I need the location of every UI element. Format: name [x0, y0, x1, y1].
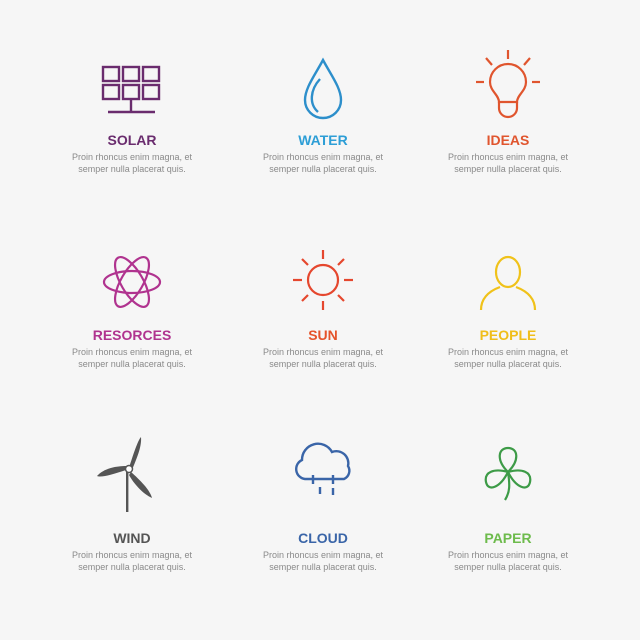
description: water [263, 152, 384, 174]
icon: cloud with rain [296, 444, 349, 495]
icon: light bulb [476, 50, 540, 117]
item: sun [263, 250, 384, 369]
description: resources: Proin rhoncus enim magna, et [72, 347, 193, 357]
description: paper: semper nulla placerat quis. [454, 562, 562, 572]
title: sun: SUN [308, 327, 338, 343]
description: sun [263, 347, 384, 369]
item: people [448, 257, 569, 369]
title: solar: SOLAR [108, 132, 156, 148]
item: water [263, 60, 384, 174]
description: solar [72, 152, 193, 174]
description: ideas [448, 152, 569, 174]
title: cloud: CLOUD [298, 530, 348, 546]
description: resources: semper nulla placerat quis. [78, 359, 186, 369]
title: resources: RESORCES [93, 327, 171, 343]
title: ideas: IDEAS [487, 132, 529, 148]
icon: clover [486, 448, 530, 500]
icon: wind turbine [97, 437, 152, 512]
description: sun: semper nulla placerat quis. [269, 359, 377, 369]
title: wind: WIND [113, 530, 151, 546]
description: ideas: Proin rhoncus enim magna, et [448, 152, 569, 162]
title: water: WATER [298, 132, 348, 148]
item: solar [72, 67, 193, 174]
icon: water drop [305, 60, 341, 118]
icon: solar panel [103, 67, 159, 112]
description: wind: semper nulla placerat quis. [78, 562, 186, 572]
item: resources [72, 252, 193, 369]
icon: atom [104, 252, 160, 312]
description: water: Proin rhoncus enim magna, et [263, 152, 384, 162]
description: solar: Proin rhoncus enim magna, et [72, 152, 193, 162]
description: wind: Proin rhoncus enim magna, et [72, 550, 193, 560]
description: people: semper nulla placerat quis. [454, 359, 562, 369]
icon: person [481, 257, 535, 310]
description: people: Proin rhoncus enim magna, et [448, 347, 569, 357]
item: paper [448, 448, 569, 572]
item: wind [72, 437, 193, 572]
description: resources [72, 347, 193, 369]
description: paper [448, 550, 569, 572]
icon: sun [293, 250, 353, 310]
description: water: semper nulla placerat quis. [269, 164, 377, 174]
description: wind [72, 550, 193, 572]
description: people [448, 347, 569, 369]
item: ideas [448, 50, 569, 174]
description: paper: Proin rhoncus enim magna, et [448, 550, 569, 560]
description: sun: Proin rhoncus enim magna, et [263, 347, 384, 357]
description: solar: semper nulla placerat quis. [78, 164, 186, 174]
item: cloud [263, 444, 384, 572]
title: people: PEOPLE [480, 327, 536, 343]
description: cloud [263, 550, 384, 572]
description: cloud: Proin rhoncus enim magna, et [263, 550, 384, 560]
description: cloud: semper nulla placerat quis. [269, 562, 377, 572]
description: ideas: semper nulla placerat quis. [454, 164, 562, 174]
title: paper: PAPER [484, 530, 532, 546]
